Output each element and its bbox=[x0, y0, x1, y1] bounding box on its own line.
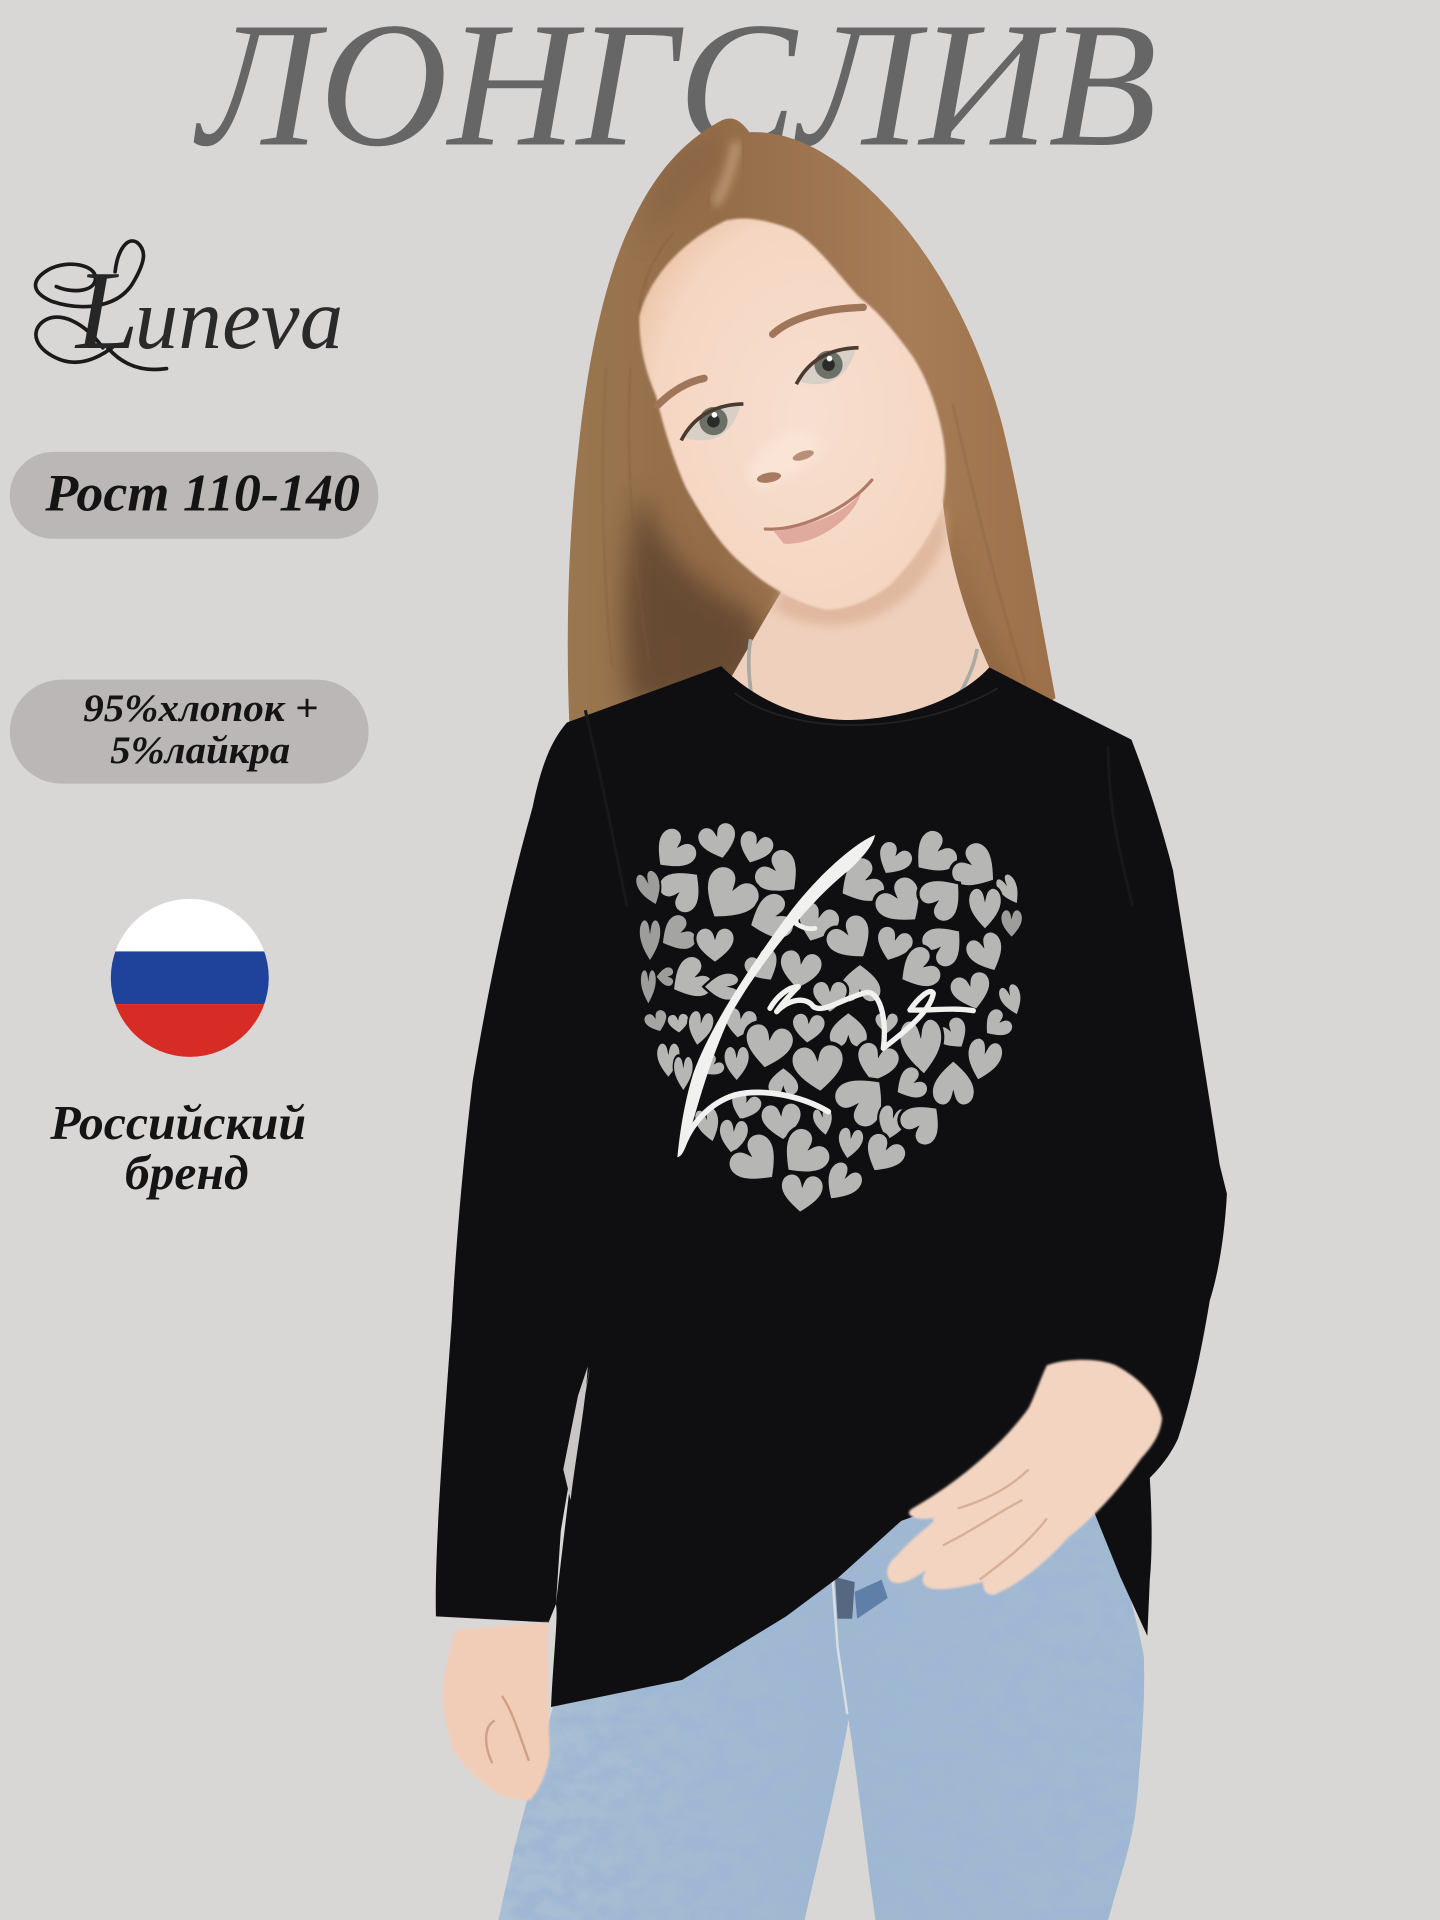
left eyebrow bbox=[658, 378, 704, 405]
right hand bbox=[887, 1360, 1162, 1595]
left eye bbox=[674, 397, 751, 448]
right eyebrow bbox=[773, 307, 863, 334]
model photo illustration bbox=[436, 118, 1227, 1920]
badge: fabric composition bbox=[10, 680, 369, 784]
brand logo: Luneva: L bbox=[76, 249, 139, 373]
silver hearts bbox=[633, 819, 1028, 1215]
badge: height range: Рост 110-140 bbox=[44, 465, 360, 523]
nose bbox=[749, 429, 823, 487]
longsleeve shirt bbox=[436, 666, 1227, 1707]
mouth bbox=[765, 480, 872, 544]
caption: Russian brand: бренд bbox=[125, 1145, 249, 1200]
shirt print: glitter heart with signature bbox=[633, 819, 1028, 1215]
white signature bbox=[677, 835, 973, 1157]
neck and necklace bbox=[698, 502, 998, 747]
badge: fabric composition: 5%лайкра bbox=[110, 729, 290, 772]
caption: Russian brand bbox=[49, 1095, 306, 1200]
badge: fabric composition: 95%хлопок + bbox=[83, 687, 318, 730]
brand logo: Luneva bbox=[36, 241, 343, 373]
left hand bbox=[443, 1622, 550, 1800]
right eye bbox=[789, 341, 866, 392]
caption: Russian brand: Российский bbox=[49, 1095, 306, 1150]
brand logo: Luneva: uneva bbox=[135, 271, 343, 367]
jeans bbox=[498, 1506, 1144, 1920]
face bbox=[639, 218, 946, 610]
badge: height range bbox=[10, 452, 378, 539]
icon: Russian flag circle bbox=[110, 898, 269, 1057]
hair bbox=[568, 118, 1056, 735]
